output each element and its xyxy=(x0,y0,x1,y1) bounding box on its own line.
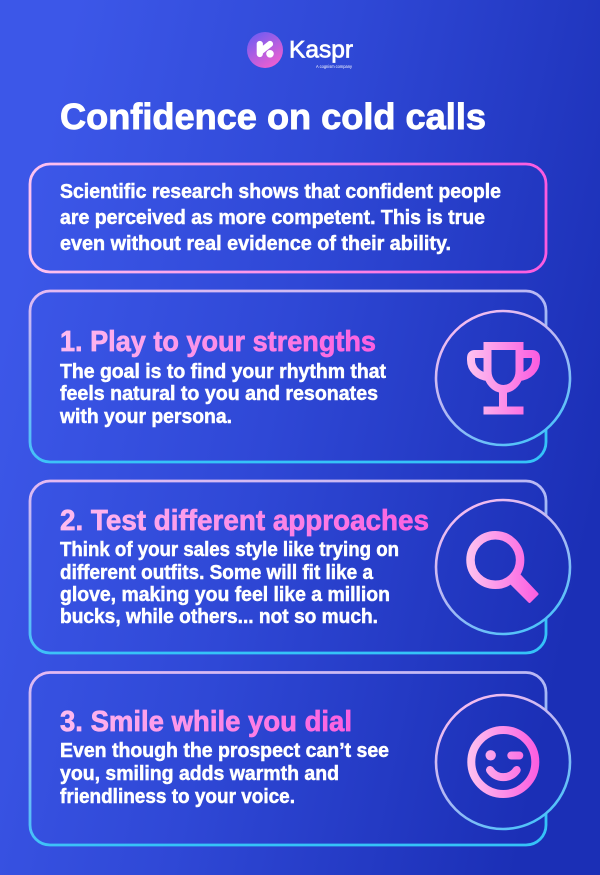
logo: Kaspr xyxy=(247,32,353,69)
icon: trophy in ring xyxy=(436,311,570,445)
heading: 1: 1. Play to your strengths xyxy=(60,326,376,358)
body: 2: glove, making you feel like a million xyxy=(60,584,390,606)
panel: test different approaches xyxy=(30,481,570,653)
body: 3 xyxy=(60,740,389,808)
intro text: Scientific research shows that confident people xyxy=(60,181,501,203)
body: 1: The goal is to find your rhythm that xyxy=(60,361,386,383)
body: 2: Think of your sales style like trying on xyxy=(60,539,399,561)
body: 2 xyxy=(60,539,399,628)
body: 1: with your persona. xyxy=(59,406,232,428)
logo wordmark: Kaspr xyxy=(289,36,353,64)
body: 3: you, smiling adds warmth and xyxy=(60,763,339,785)
icon: magnifier in ring xyxy=(436,500,570,634)
logo tagline: A cognism company xyxy=(316,64,353,69)
body: 1: feels natural to you and resonates xyxy=(60,383,378,405)
title: Confidence on cold calls xyxy=(60,96,486,137)
heading: 3: 3. Smile while you dial xyxy=(60,706,352,738)
icon: winking smiley in ring xyxy=(436,695,570,829)
icon: Kaspr badge xyxy=(247,32,283,68)
body: 3: friendliness to your voice. xyxy=(60,786,295,808)
intro text: are perceived as more competent. This is true xyxy=(60,207,485,229)
intro text: even without real evidence of their ability. xyxy=(60,233,451,255)
body: 2: bucks, while others... not so much. xyxy=(60,606,378,628)
heading: 2: 2. Test different approaches xyxy=(60,505,429,537)
body: 2: different outfits. Some will fit like a xyxy=(60,562,374,584)
panel: play to your strengths xyxy=(30,291,570,462)
body: 1 xyxy=(59,361,386,428)
intro text xyxy=(60,181,501,255)
panel: intro xyxy=(30,164,546,272)
panel: smile while you dial xyxy=(30,672,570,845)
body: 3: Even though the prospect can’t see xyxy=(60,740,389,762)
